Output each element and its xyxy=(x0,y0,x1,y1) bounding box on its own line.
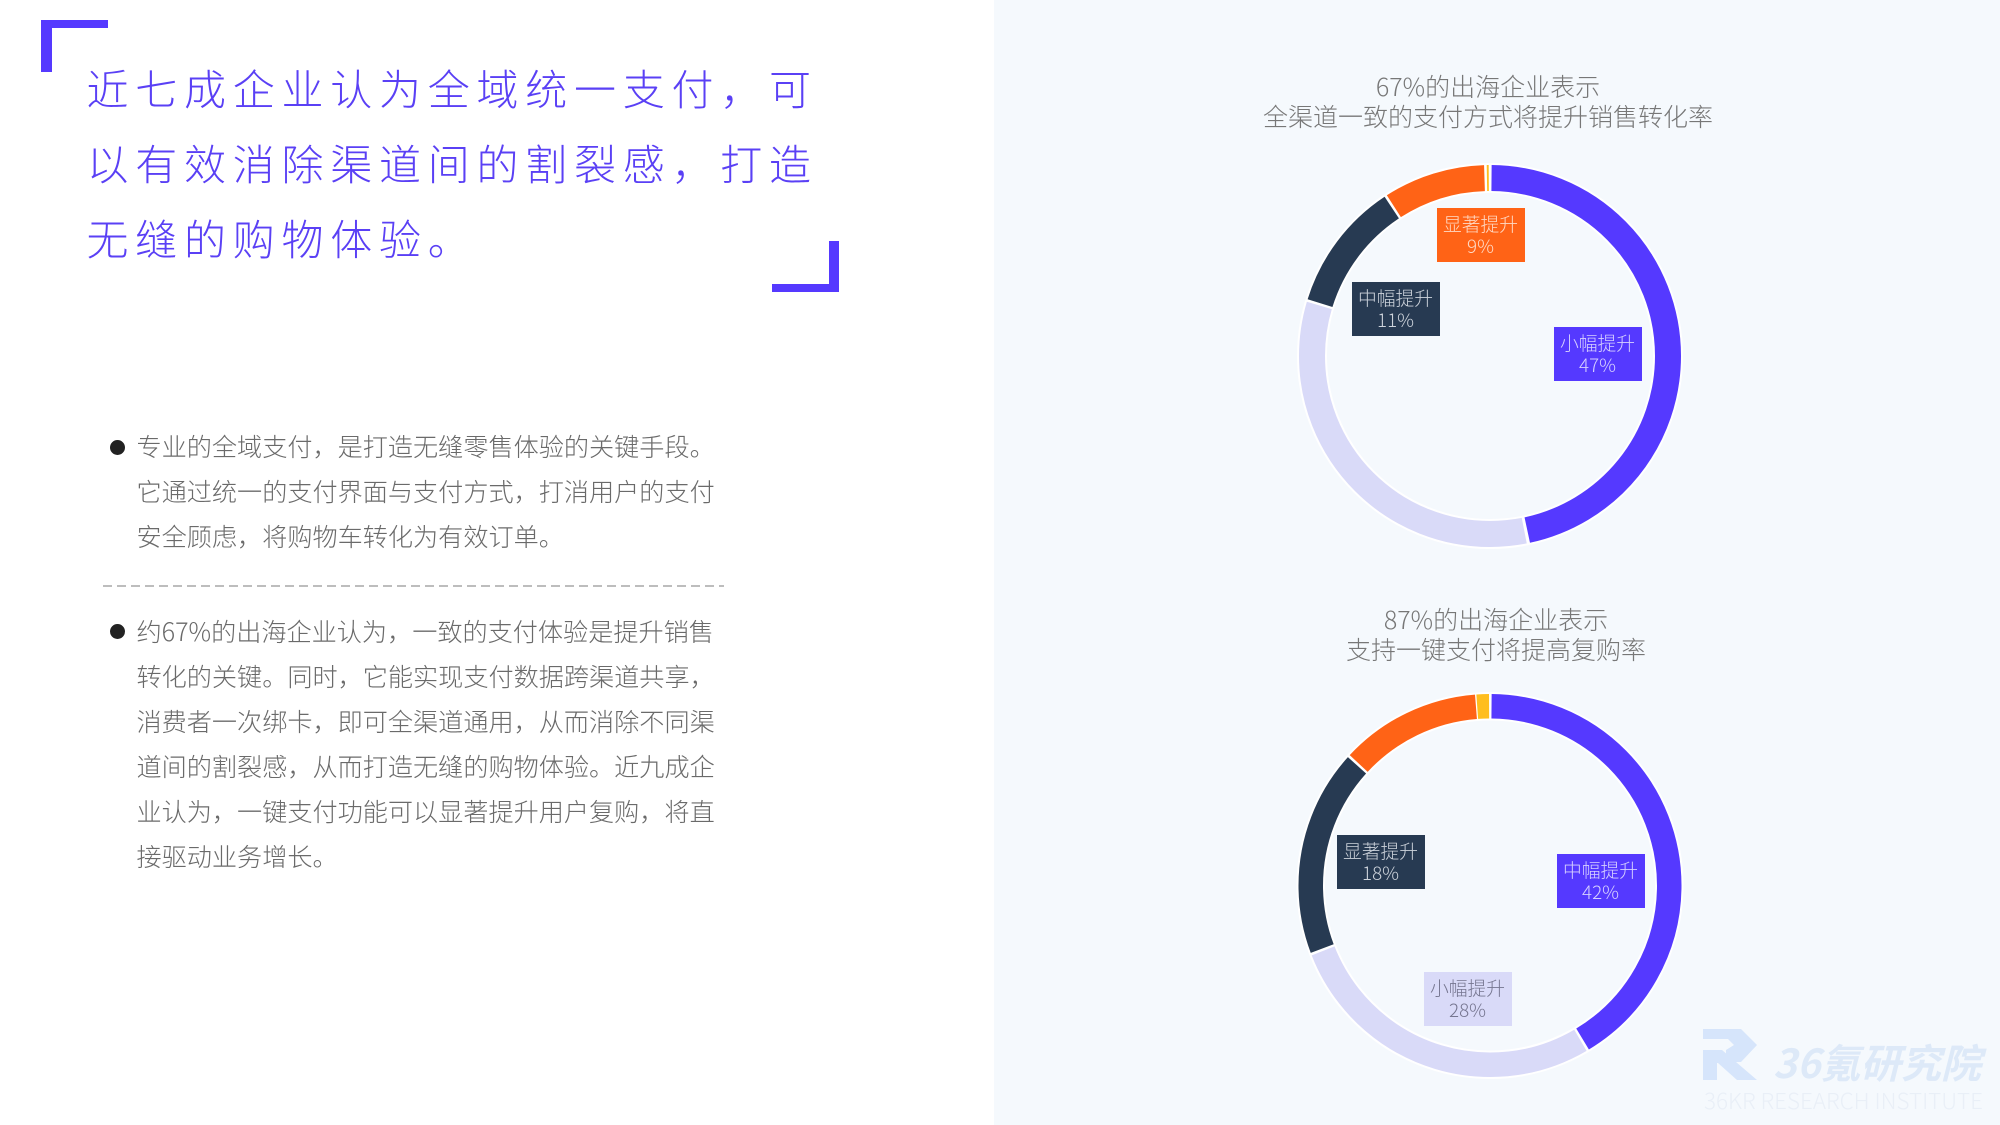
label: 显著提升 9%: 显著提升 xyxy=(1443,210,1518,237)
label: 显著提升 9%: 9% xyxy=(1467,232,1494,259)
text block: second point: 消费者一次绑卡，即可全渠道通用，从而消除不同渠 xyxy=(136,703,715,739)
watermark english name: 36KR RESEARCH INSTITUTE xyxy=(1704,1084,1983,1116)
watermark logo xyxy=(1703,1029,1987,1116)
label: 中幅提升 42%: 中幅提升 xyxy=(1563,856,1638,882)
label: 小幅提升 47%: 47% xyxy=(1579,351,1616,378)
text block: second point: 转化的关键。同时，它能实现支付数据跨渠道共享， xyxy=(136,658,715,694)
text block: first point xyxy=(136,428,715,554)
heading: chart 2: 支持一键支付将提高复购率 xyxy=(1346,631,1646,667)
label: 显著提升 18% xyxy=(1336,834,1424,888)
label: 显著提升 18%: 显著提升 xyxy=(1343,836,1418,864)
label: 中幅提升 11%: 11% xyxy=(1377,306,1414,333)
text block: first point: 安全顾虑，将购物车转化为有效订单。 xyxy=(136,518,564,554)
text block: first point: 它通过统一的支付界面与支付方式，打消用户的支付 xyxy=(136,473,715,509)
label: 小幅提升 28%: 小幅提升 xyxy=(1430,974,1505,1001)
icon: top-left bracket xyxy=(41,20,108,72)
icon: bottom-right bracket xyxy=(772,241,839,292)
label: 显著提升 18%: 18% xyxy=(1362,858,1399,886)
heading: chart 2: 87%的出海企业表示 xyxy=(1384,601,1608,637)
label: 中幅提升 42%: 42% xyxy=(1582,878,1619,904)
label: 中幅提升 42% xyxy=(1556,854,1644,908)
text block: first point: 专业的全域支付，是打造无缝零售体验的关键手段。 xyxy=(136,428,715,464)
donut chart 2 xyxy=(1296,692,1684,1079)
label: 小幅提升 47% xyxy=(1554,327,1642,381)
donut chart 1 xyxy=(1297,163,1683,549)
title: 近七成企业认为全域统一支付，可 xyxy=(86,57,818,118)
label: 中幅提升 11%: 中幅提升 xyxy=(1358,284,1433,311)
title: 以有效消除渠道间的割裂感，打造 xyxy=(86,132,818,193)
panel: right background xyxy=(994,0,2000,1125)
heading: chart 1: 全渠道一致的支付方式将提升销售转化率 xyxy=(1263,98,1713,134)
heading: chart 1 xyxy=(1263,68,1713,134)
bullet marker 1 xyxy=(110,440,125,455)
text block: second point: 接驱动业务增长。 xyxy=(136,838,338,874)
label: 显著提升 9% xyxy=(1436,208,1524,262)
label: 小幅提升 28% xyxy=(1424,972,1512,1026)
text block: second point: 道间的割裂感，从而打造无缝的购物体验。近九成企 xyxy=(136,748,715,784)
label: 小幅提升 47%: 小幅提升 xyxy=(1560,329,1635,356)
heading: chart 1: 67%的出海企业表示 xyxy=(1376,68,1600,104)
text block: second point: 约67%的出海企业认为，一致的支付体验是提升销售 xyxy=(136,613,714,649)
icon: R mark xyxy=(1703,1029,1757,1080)
label: 小幅提升 28%: 28% xyxy=(1449,996,1486,1023)
dashed divider xyxy=(103,585,724,587)
title xyxy=(86,57,818,268)
heading: chart 2 xyxy=(1346,601,1646,667)
watermark chinese name: 36氪研究院 xyxy=(1773,1032,1987,1090)
title: 无缝的购物体验。 xyxy=(86,207,477,268)
label: 中幅提升 11% xyxy=(1352,282,1440,336)
text block: second point: 业认为，一键支付功能可以显著提升用户复购，将直 xyxy=(136,793,715,829)
bullet marker 2 xyxy=(110,624,125,639)
text block: second point xyxy=(136,613,715,874)
